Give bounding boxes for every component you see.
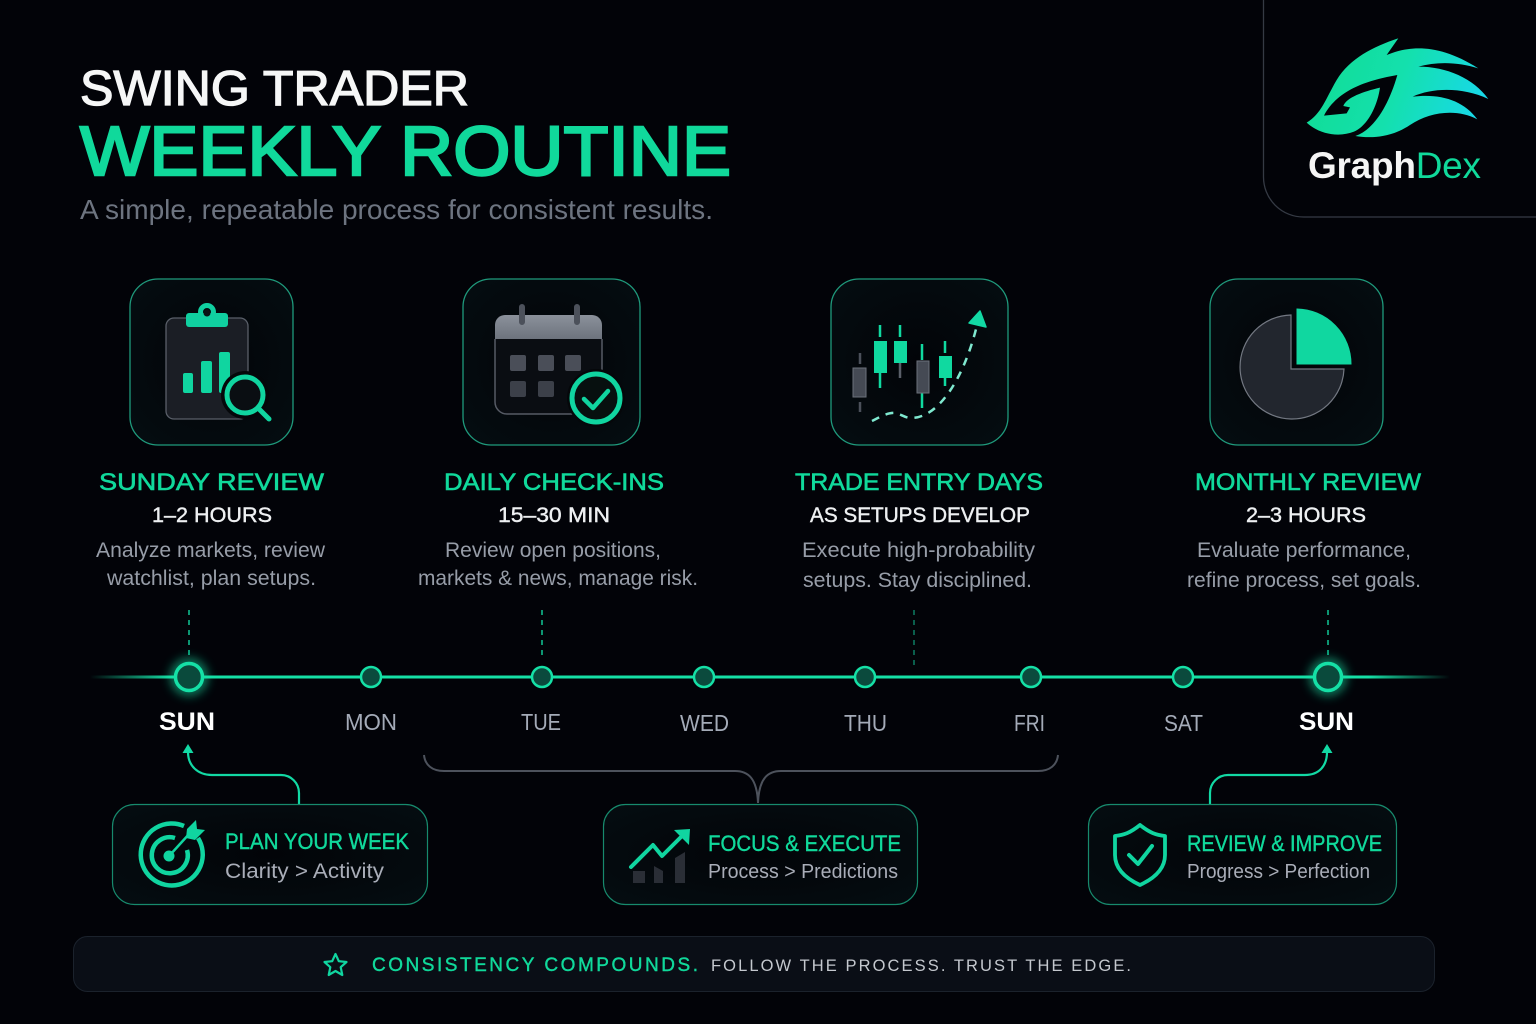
callout text: [1187, 831, 1382, 883]
callout text: FOCUS & EXECUTE: [708, 831, 901, 856]
node: sunday end: [1314, 664, 1342, 690]
node: thursday: [855, 667, 875, 687]
description: Evaluate performance,: [1197, 539, 1411, 562]
duration: 2–3 HOURS: [1246, 504, 1366, 527]
node: monday: [361, 667, 381, 687]
arrow: plan to sunday: [182, 744, 299, 804]
heading: daily check-ins: DAILY CHECK-INS: [444, 469, 664, 496]
panel: trade entry days: [795, 279, 1043, 592]
heading: trade entry days: TRADE ENTRY DAYS: [795, 469, 1043, 496]
icon: candlesticks with dashed arrow: [831, 279, 1008, 445]
callout text: Progress > Perfection: [1187, 861, 1370, 883]
day labels: SAT: [1164, 710, 1203, 736]
callout text: Clarity > Activity: [225, 860, 385, 883]
icon: pie chart: [1210, 279, 1383, 445]
panel: monthly review: [1187, 279, 1421, 592]
callout: review and improve: [1088, 804, 1396, 904]
icon: calendar with check: [463, 279, 640, 445]
arrow: review to sunday: [1210, 744, 1332, 804]
logo wordmark: GraphDex: [1308, 145, 1482, 186]
logo panel: [1264, 0, 1536, 217]
day labels: THU: [844, 710, 887, 736]
callout text: PLAN YOUR WEEK: [225, 829, 409, 854]
subtitle: A simple, repeatable process for consistent results.: [80, 194, 713, 225]
duration: 15–30 MIN: [498, 504, 610, 527]
title: [80, 62, 731, 190]
node: saturday: [1173, 667, 1193, 687]
description: refine process, set goals.: [1187, 569, 1421, 592]
day labels: TUE: [521, 709, 561, 735]
timeline: [90, 610, 1450, 736]
footer text: FOLLOW THE PROCESS. TRUST THE EDGE.: [711, 957, 1131, 975]
description: [418, 539, 698, 590]
description: [96, 539, 326, 590]
description: [802, 539, 1036, 592]
description: [1187, 539, 1421, 592]
node: wednesday: [694, 667, 714, 687]
description: setups. Stay disciplined.: [803, 569, 1032, 592]
day labels: MON: [345, 709, 397, 735]
heading: monthly review: MONTHLY REVIEW: [1195, 469, 1421, 496]
duration: AS SETUPS DEVELOP: [810, 504, 1030, 527]
icon: target: [141, 820, 205, 885]
logo mark: [1307, 38, 1488, 137]
bracket: monday to friday: [424, 755, 1058, 803]
footer text: CONSISTENCY COMPOUNDS.: [372, 955, 698, 976]
day labels: FRI: [1014, 710, 1045, 736]
icon: shield check: [1115, 825, 1165, 885]
duration: 1–2 HOURS: [152, 504, 272, 527]
icon: clipboard with magnifier: [130, 279, 293, 445]
description: Execute high-probability: [802, 539, 1036, 562]
day labels: SUN: [1299, 708, 1354, 736]
heading: sunday review: SUNDAY REVIEW: [99, 469, 324, 496]
footer text: [372, 955, 1131, 976]
description: markets & news, manage risk.: [418, 567, 698, 590]
callout: focus and execute: [604, 804, 918, 904]
callout text: [225, 829, 409, 883]
node: sunday start: [176, 664, 202, 690]
footer banner: [74, 936, 1434, 992]
description: Review open positions,: [445, 539, 661, 562]
description: watchlist, plan setups.: [106, 567, 316, 590]
panel: daily check-ins: [418, 279, 698, 590]
callout text: Process > Predictions: [708, 861, 898, 883]
icon: trending arrow: [631, 829, 690, 883]
panel: sunday review: [96, 279, 326, 590]
day labels: SUN: [159, 708, 215, 736]
callout: plan your week: [112, 804, 428, 904]
callout text: REVIEW & IMPROVE: [1187, 831, 1382, 856]
title: SWING TRADER: [80, 62, 469, 116]
node: tuesday: [532, 667, 552, 687]
day labels: WED: [680, 710, 729, 736]
title: WEEKLY ROUTINE: [80, 112, 731, 190]
description: Analyze markets, review: [96, 539, 326, 562]
node: friday: [1021, 667, 1041, 687]
icon: star: [324, 954, 346, 975]
day labels: [159, 708, 1354, 736]
callout text: [708, 831, 901, 883]
